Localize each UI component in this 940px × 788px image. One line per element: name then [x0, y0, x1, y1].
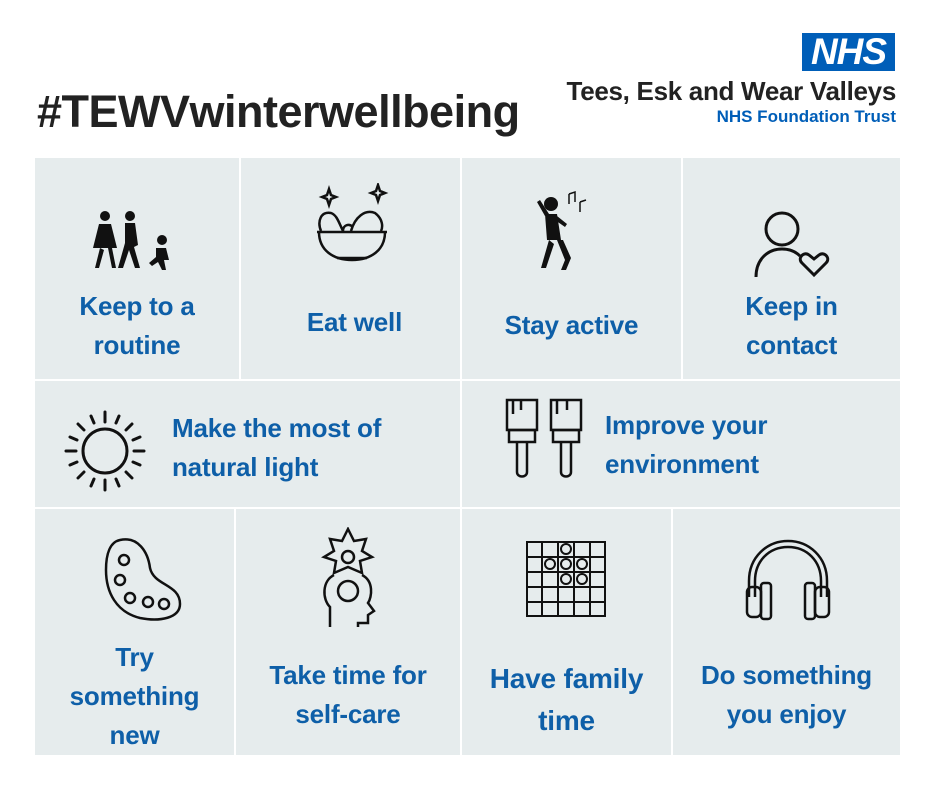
trust name: Tees, Esk and Wear Valleys — [567, 76, 896, 106]
icon: person heart — [754, 212, 830, 277]
title: #TEWVwinterwellbeing — [37, 86, 520, 137]
text: self-care: self-care — [295, 699, 401, 729]
text: routine — [79, 291, 195, 360]
text: try something new: Try — [115, 642, 154, 672]
text: stay active: Stay active — [505, 310, 638, 340]
text: try something new — [70, 642, 199, 750]
text: keep in contact — [745, 291, 838, 360]
text: family time: time — [538, 705, 595, 736]
text: family time — [490, 663, 644, 736]
text: enjoy: you enjoy — [727, 699, 846, 729]
panel: row 1 — [35, 158, 239, 379]
icon: sun — [64, 410, 146, 492]
text: try something new: new — [110, 720, 159, 750]
text: routine: routine — [94, 330, 180, 360]
logo — [566, 31, 896, 126]
icon: salad bowl — [317, 183, 388, 262]
text: enjoy: Do something — [701, 660, 872, 690]
text: environment: environment — [605, 449, 759, 479]
text: eat well: Eat well — [307, 307, 402, 337]
icon: paint brushes — [506, 398, 582, 478]
nhs box: NHS — [811, 31, 886, 72]
text: environment: Improve your — [605, 410, 767, 440]
text: try something new: something — [70, 681, 199, 711]
icon: mind flower — [321, 527, 376, 627]
icon: board game — [526, 541, 606, 617]
text: natural light — [172, 413, 382, 482]
text: enjoy — [701, 660, 872, 729]
text: routine: Keep to a — [79, 291, 195, 321]
icon: palette — [104, 538, 182, 621]
text: family time: Have family — [490, 663, 643, 694]
text: natural light: natural light — [172, 452, 318, 482]
text: keep in contact: Keep in — [745, 291, 838, 321]
icon: dancer — [537, 191, 586, 270]
text: keep in contact: contact — [746, 330, 837, 360]
text: environment — [605, 410, 768, 479]
text: self-care: Take time for — [269, 660, 427, 690]
text: natural light: Make the most of — [172, 413, 381, 443]
icon: headphones — [746, 540, 830, 620]
text: self-care — [269, 660, 427, 729]
subtitle: NHS Foundation Trust — [717, 107, 896, 126]
icon: family walking — [93, 211, 169, 270]
